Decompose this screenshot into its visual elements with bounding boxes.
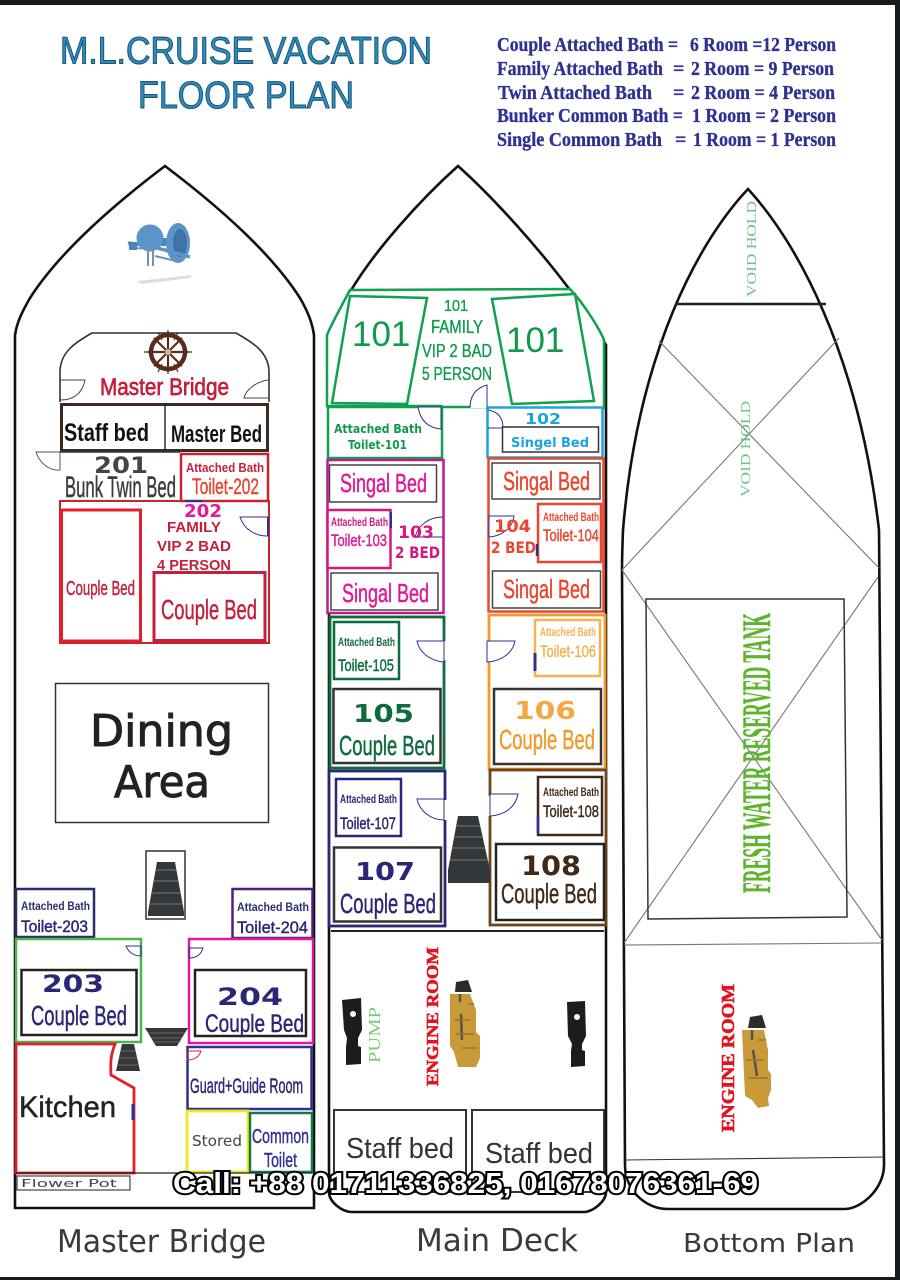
icon: bottom engine [742, 1015, 771, 1108]
toilet 108: Attached Bath [543, 785, 599, 799]
title: M.L.CRUISE VACATION [60, 30, 432, 72]
bed: 101 left: 101 [352, 315, 410, 354]
legend: room counts: 1 Room = 1 Person [693, 129, 836, 151]
couple bed left: Couple Bed [66, 578, 135, 600]
text: FRESH WATER RESERVED TANK [734, 613, 779, 893]
icon: ship wheel [144, 330, 192, 374]
toilet 203: Attached Bath [21, 899, 90, 913]
room 201 bunk twin: Bunk Twin Bed [65, 471, 176, 504]
toilet 204: Toilet-204 [237, 918, 308, 937]
couple bed right: Couple Bed [161, 594, 257, 625]
toilet 105: Toilet-105 [338, 656, 394, 675]
hull: main deck [329, 166, 606, 1212]
room 204: Couple Bed [205, 1010, 304, 1038]
dining area [56, 684, 268, 822]
bed 108 [496, 844, 604, 920]
legend: room counts: 1 Room = 2 Person [692, 105, 836, 127]
bed 106 [494, 689, 601, 764]
bed 108: Couple Bed [501, 878, 597, 909]
stairs: kitchen side [116, 1044, 140, 1071]
label: void hold top: VOID HOLD [745, 201, 760, 297]
bed 105: 105 [353, 699, 414, 728]
room 203 [16, 939, 141, 1042]
panel: staff and master bed [62, 404, 268, 450]
bed: singal top: Singal Bed [340, 468, 427, 498]
bed: singal top [492, 463, 600, 499]
flower pot: Flower Pot [21, 1177, 118, 1190]
hull: master bridge deck [15, 166, 314, 1208]
staff bed left [334, 1110, 466, 1192]
room 101 family suite: VIP 2 BAD [422, 341, 492, 361]
room 103 [328, 460, 444, 613]
toilet 204 [232, 889, 312, 938]
bottom plan diagonal bracing [622, 338, 884, 1160]
common toilet: Common [252, 1126, 309, 1148]
bed: singal bottom: Singal Bed [342, 578, 429, 608]
staff bed left: Staff bed [346, 1133, 454, 1165]
couple bed left [62, 510, 140, 641]
toilet 101: Attached Bath [334, 422, 422, 436]
common toilet [250, 1113, 312, 1172]
toilet 202: Toilet-202 [192, 474, 259, 499]
caption: bottom plan: Bottom Plan [683, 1229, 855, 1259]
stairs: lower landing [145, 1028, 188, 1046]
icon: main deck engine [450, 980, 480, 1067]
label: engine room bottom: ENGINE ROOM [718, 984, 738, 1132]
title [60, 30, 432, 117]
staff bed right [472, 1110, 604, 1192]
room 202 family [60, 501, 269, 643]
room 203: Couple Bed [31, 1000, 127, 1031]
room 201 bunk twin [36, 452, 180, 504]
toilet 105 [334, 622, 399, 679]
room 105 [330, 617, 445, 768]
legend: room counts: Bunker Common Bath = [497, 105, 683, 127]
toilet 106: Attached Bath [540, 625, 596, 639]
legend: room counts: Twin Attached Bath [498, 82, 652, 104]
toilet 107 [336, 779, 401, 836]
toilet 104: Attached Bath [543, 510, 599, 524]
dining area: Dining [90, 706, 233, 757]
bed 106: Couple Bed [499, 724, 595, 755]
room 108 [490, 770, 606, 925]
room 203: 203 [42, 970, 104, 998]
heading: master bridge: Master Bridge [100, 374, 229, 401]
guard and guide room: Guard+Guide Room [190, 1075, 303, 1098]
room 107 [329, 771, 445, 926]
toilet 104: Toilet-104 [543, 526, 599, 545]
toilet 103: Attached Bath [331, 515, 388, 529]
caption: main deck: Main Deck [416, 1223, 578, 1259]
room 202 family: 4 PERSON [157, 557, 231, 574]
legend: room counts: Couple Attached Bath = [497, 34, 678, 56]
staff bed right: Staff bed [485, 1138, 593, 1170]
legend: room counts: = [673, 58, 684, 80]
label: pump: PUMP [365, 1007, 384, 1063]
bed: singal top: Singal Bed [503, 466, 590, 496]
room 101 family suite [327, 289, 604, 408]
room 202 family: VIP 2 BAD [157, 538, 231, 555]
toilet 103 [328, 510, 391, 568]
room 101 family suite: 101 [444, 298, 468, 315]
panel: staff and master bed: Master Bed [171, 421, 262, 448]
dining area: Area [114, 757, 210, 808]
toilet 104 [537, 504, 601, 562]
bed: singal bottom [492, 571, 600, 608]
caption: master bridge: Master Bridge [57, 1224, 266, 1260]
room 202 family: 202 [184, 501, 222, 522]
toilet 202: Attached Bath [186, 460, 264, 475]
room 202 family: FAMILY [167, 519, 221, 536]
toilet 108 [538, 777, 602, 835]
bed 107: Couple Bed [340, 888, 436, 919]
toilet 101 [328, 407, 442, 458]
legend: room counts: 6 Room =12 Person [690, 34, 836, 56]
room 204 [189, 939, 313, 1043]
toilet 203: Toilet-203 [21, 917, 88, 936]
common toilet: Toilet [264, 1150, 297, 1172]
legend: room counts: = [673, 82, 684, 104]
room 201 bunk twin: 201 [94, 454, 148, 479]
legend: room counts: = [675, 129, 686, 151]
room 102: Singel Bed [511, 436, 589, 451]
room 102 [488, 408, 602, 458]
toilet 101: Toilet-101 [348, 438, 407, 452]
kitchen [16, 1044, 134, 1173]
call banner: Call: +88 01711336825, 01678076361-69 [173, 1168, 758, 1200]
room 204: 204 [217, 983, 283, 1011]
bed 105: Couple Bed [339, 730, 435, 761]
toilet 108: Toilet-108 [543, 802, 599, 821]
room 101 family suite: 5 PERSON [422, 364, 492, 384]
room 102: 102 [525, 410, 561, 428]
room 106 [487, 615, 605, 769]
guard and guide room [187, 1047, 312, 1109]
toilet 202 [181, 454, 268, 501]
hull: bottom plan [622, 189, 884, 1209]
room 103: 103 [398, 523, 434, 543]
legend: room counts: Family Attached Bath [497, 58, 663, 80]
icon: anchor winch [128, 223, 192, 284]
toilet 107: Toilet-107 [340, 814, 396, 833]
legend: room counts: 2 Room = 9 Person [691, 58, 834, 80]
panel: master bridge room [60, 333, 269, 402]
legend: room counts: 2 Room = 4 Person [691, 82, 835, 104]
engine room divider [331, 930, 604, 932]
legend: room counts [497, 34, 836, 151]
icon: pump left [342, 998, 362, 1065]
bed 107 [334, 848, 441, 922]
toilet 105: Attached Bath [338, 635, 395, 649]
stored room [187, 1111, 248, 1172]
bed 107: 107 [355, 857, 415, 886]
title: FLOOR PLAN [138, 75, 354, 117]
room 101 family suite: FAMILY [431, 317, 483, 337]
toilet 204: Attached Bath [237, 900, 309, 914]
bulkhead line [675, 303, 826, 305]
toilet 103: Toilet-103 [331, 531, 387, 550]
toilet 106 [535, 620, 600, 676]
toilet 107: Attached Bath [340, 792, 397, 806]
bed: singal bottom [331, 573, 438, 610]
icon: pump right [567, 1001, 586, 1067]
toilet 203 [16, 889, 94, 937]
bed: 101 left [332, 296, 427, 404]
flower pot [17, 1176, 130, 1190]
stairs: main deck [448, 816, 490, 883]
bed: singal bottom: Singal Bed [503, 574, 590, 604]
room 104: 2 BED [491, 538, 536, 557]
label: engine room main deck: ENGINE ROOM [423, 947, 442, 1086]
room 104 [488, 458, 604, 612]
toilet 106: Toilet-106 [540, 642, 596, 661]
bed 105 [334, 689, 440, 763]
stored room: Stored [192, 1132, 242, 1150]
label: void hold lower: VOID HOLD [739, 401, 754, 497]
bed: 101 right: 101 [506, 321, 564, 360]
bed: singal top [330, 465, 436, 502]
panel: staff and master bed: Staff bed [64, 419, 149, 447]
kitchen: Kitchen [19, 1091, 116, 1124]
bed 108: 108 [521, 851, 581, 882]
bed 106: 106 [514, 696, 576, 725]
couple bed right [154, 572, 265, 640]
legend: room counts: Single Common Bath [497, 129, 662, 151]
bed: 101 right [492, 294, 594, 404]
stairs: upper deck [146, 851, 185, 919]
room 104: 104 [494, 517, 531, 537]
room 103: 2 BED [395, 543, 440, 562]
